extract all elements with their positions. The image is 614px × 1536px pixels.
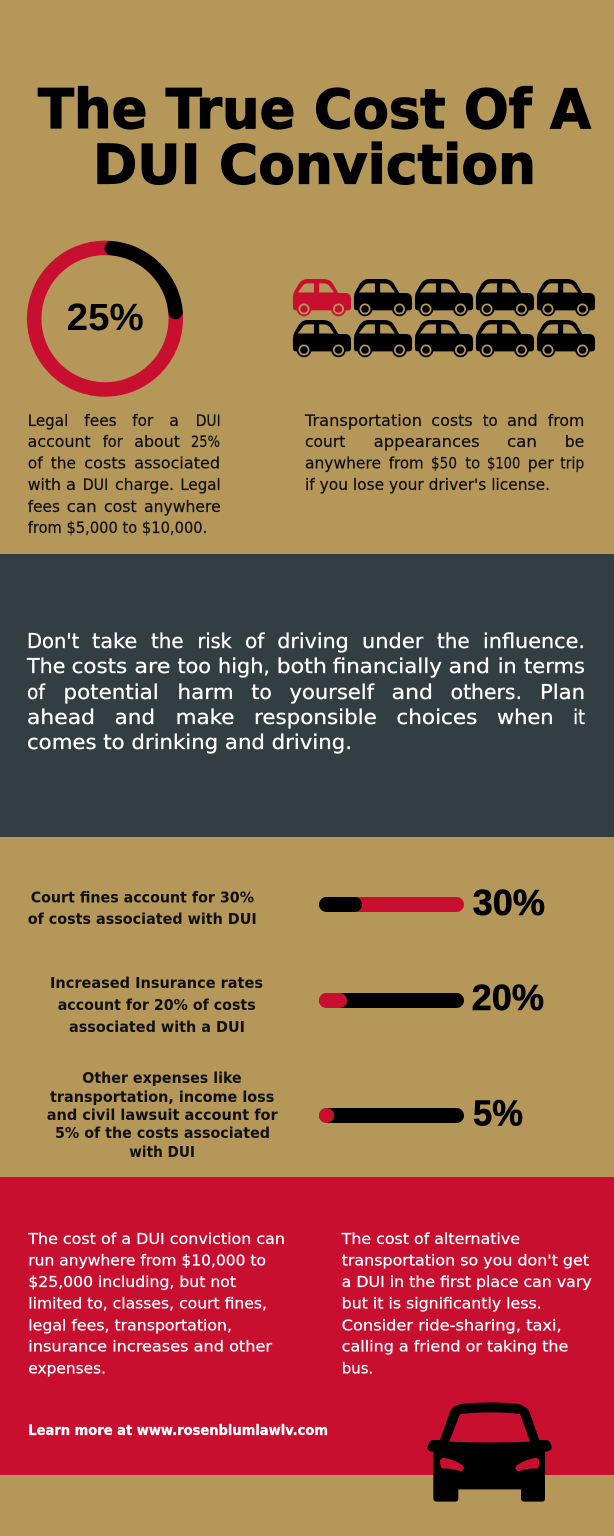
text: cost of a DUI conviction: limited to, classes, court fines, (28, 1295, 267, 1313)
text: legal fees: can (67, 497, 97, 516)
text: cost of a DUI conviction (27, 1230, 285, 1377)
text: court fines: Court fines account for 30% (31, 890, 254, 907)
text: warning: and (449, 654, 490, 678)
text: warning: the (151, 629, 184, 653)
text: legal fees: DUI (83, 475, 108, 494)
panel: cost breakdown (0, 837, 614, 1177)
text: legal fees: Legal (180, 475, 221, 494)
bar chart: 20% (319, 977, 544, 1018)
icon: front view of car (427, 1402, 552, 1502)
text: transportation costs: court (305, 432, 345, 451)
text: alternative transportation: The cost of alternative (341, 1230, 520, 1248)
text: cost of a DUI conviction: insurance increases and other (28, 1338, 273, 1356)
panel: bottom band (0, 1475, 614, 1536)
icon: black cars, first row (354, 279, 595, 316)
text: cost of a DUI conviction: expenses. (28, 1359, 106, 1377)
icon row: ten cars, one red (292, 279, 596, 358)
text: transportation costs: from (389, 454, 424, 472)
text: legal fees: with (28, 475, 61, 494)
text: cost of a DUI conviction: The cost of a DUI conviction can (27, 1230, 285, 1248)
text: warning: to (251, 680, 272, 704)
text: legal fees: about (134, 432, 180, 451)
text: legal fees: a (169, 411, 179, 430)
panel: top statistics (0, 0, 614, 554)
text: transportation costs: anywhere (305, 454, 381, 472)
text: warning: when (497, 705, 554, 729)
text: warning: take (92, 629, 137, 653)
text: other expenses: and civil lawsuit account for (47, 1107, 278, 1124)
text: warning: influence. (483, 629, 585, 653)
text: legal fees: fees (28, 497, 60, 516)
text: court fines: of costs associated with DUI (28, 911, 257, 928)
text: warning: under (362, 629, 424, 653)
text: warning: and (115, 705, 155, 729)
donut chart: 25%: 25% (67, 297, 144, 339)
text: transportation costs: $100 (487, 454, 520, 472)
text: warning: Plan (540, 680, 585, 704)
text: warning: Don't (27, 629, 79, 653)
text: warning: both (277, 654, 327, 678)
text: legal fees: cost (104, 497, 137, 516)
text: legal fees: from $5,000 to $10,000. (28, 518, 207, 537)
text: warning: of (245, 629, 265, 653)
text: warning: responsible (254, 705, 377, 729)
text: other expenses: Other expenses like (82, 1070, 242, 1087)
text: transportation costs (304, 411, 584, 494)
bar chart: 30% (319, 882, 545, 923)
bar chart: 5%: 5% (473, 1093, 523, 1134)
text: other expenses: with DUI (129, 1144, 195, 1161)
text: transportation costs: be (565, 432, 584, 451)
text: transportation costs: if you lose your driver's license. (305, 475, 550, 494)
text: transportation costs: per (528, 454, 554, 472)
text: transportation costs: from (548, 411, 584, 430)
text: warning: high, (218, 654, 270, 678)
text: warning: choices (396, 705, 477, 729)
text: transportation costs: and (507, 411, 538, 430)
text: legal fees: for (132, 411, 154, 430)
bar chart: 30%: 30% (473, 882, 545, 923)
text: warning: make (176, 705, 234, 729)
text: warning: and (392, 680, 433, 704)
text: alternative transportation: a DUI in the first place can vary (342, 1273, 592, 1291)
text: legal fees: fees (84, 411, 117, 430)
bar chart: 5% (319, 1093, 523, 1134)
text: insurance rates: account for 20% of costs (58, 997, 256, 1014)
text: warning: harm (178, 680, 234, 704)
text: alternative transportation: but it is significantly less. (342, 1295, 542, 1313)
text: cost of a DUI conviction: $25,000 including, but not (28, 1273, 236, 1291)
text: cost of a DUI conviction: run anywhere from $10,000 to (28, 1251, 266, 1269)
text: warning: risk (198, 629, 232, 653)
text: legal fees: DUI (196, 411, 221, 430)
text: other expenses: 5% of the costs associated (55, 1125, 270, 1142)
text: insurance rates (50, 975, 263, 1036)
panel: warning message (0, 554, 614, 837)
text: legal fees: 25% (191, 432, 220, 451)
text: other expenses: transportation, income loss (50, 1089, 274, 1106)
text: insurance rates: associated with a DUI (69, 1019, 245, 1036)
text: transportation costs: trip (560, 454, 584, 472)
text: legal fees: account (28, 432, 91, 451)
text: warning: others. (451, 680, 522, 704)
text: legal fees (28, 411, 221, 537)
text: cost of a DUI conviction: legal fees, transportation, (28, 1316, 232, 1334)
text: court fines (28, 890, 257, 928)
text: warning: yourself (290, 680, 375, 704)
text: alternative transportation: Consider ride-sharing, taxi, (342, 1316, 562, 1334)
text: warning: are (134, 654, 170, 678)
text: alternative transportation (341, 1230, 592, 1377)
text: transportation costs: to (465, 454, 480, 472)
text: legal fees: costs (84, 454, 126, 472)
icon: black cars, second row (293, 320, 595, 357)
icon: red car (293, 279, 351, 316)
text: legal fees: the (51, 454, 76, 472)
donut chart: 25% (26, 240, 184, 397)
text: transportation costs: costs (431, 411, 473, 430)
text: other expenses (47, 1070, 278, 1161)
text: legal fees: for (103, 432, 123, 451)
text: warning: financially (333, 654, 442, 678)
text: legal fees: anywhere (144, 497, 221, 516)
text: alternative transportation: transportation so you don't get (342, 1251, 589, 1269)
panel: total cost and alternatives (0, 1177, 614, 1475)
text: warning: costs (72, 654, 127, 678)
text: warning: in (498, 654, 517, 678)
title (38, 78, 592, 196)
title: The True Cost Of A (38, 78, 591, 141)
text: alternative transportation: bus. (342, 1359, 373, 1377)
text: transportation costs: Transportation (304, 411, 422, 430)
text: legal fees: of (28, 454, 43, 472)
text: warning: of (27, 680, 46, 704)
text: warning: The (26, 654, 66, 678)
text: warning: too (178, 654, 211, 678)
text: legal fees: charge. (115, 475, 174, 494)
text: legal fees: associated (134, 454, 220, 472)
text: website link: Learn more at www.rosenblumlawlv.com (28, 1423, 328, 1439)
text: insurance rates: Increased Insurance rates (50, 975, 263, 992)
text: warning: potential (64, 680, 159, 704)
text: warning: driving (277, 629, 349, 653)
title: DUI Conviction (93, 134, 536, 196)
bar chart: 20%: 20% (472, 977, 544, 1018)
text: transportation costs: appearances (374, 432, 480, 451)
text: warning: comes to drinking and driving. (27, 730, 352, 754)
text: legal fees: a (66, 475, 76, 494)
text: warning: ahead (27, 705, 95, 729)
text: transportation costs: can (507, 432, 537, 451)
text: warning: terms (524, 654, 585, 678)
text: transportation costs: to (483, 411, 498, 430)
text: warning: it (573, 705, 585, 729)
text: legal fees: Legal (28, 411, 68, 430)
text: alternative transportation: calling a friend or taking the (342, 1338, 568, 1356)
text: warning (26, 629, 585, 754)
text: warning: the (437, 629, 470, 653)
text: transportation costs: $50 (431, 454, 457, 472)
